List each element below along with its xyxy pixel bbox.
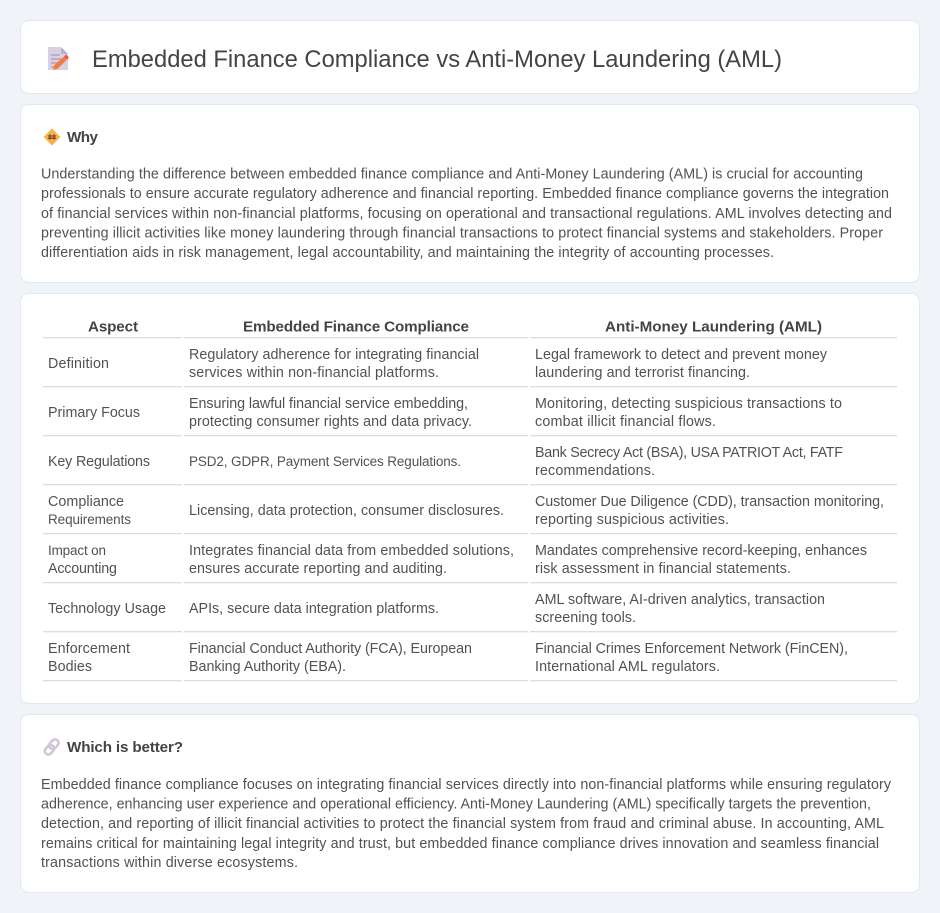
text block: why paragraph: professionals to ensure accurate regulatory adherence and financial reporting. Embedded finance compliance governs the integration	[41, 186, 889, 202]
row: key regulations: Bank Secrecy Act (BSA), USA PATRIOT Act, FATF	[535, 445, 843, 461]
row: enforcement bodies: Enforcement	[48, 641, 130, 657]
table header row: Aspect	[88, 318, 138, 336]
text block: why paragraph	[41, 166, 892, 261]
row: enforcement bodies: Financial Crimes Enforcement Network (FinCEN),	[535, 641, 848, 657]
row: definition	[48, 347, 828, 381]
row: key regulations: Key Regulations	[48, 454, 150, 470]
row: definition: services within non-financial platforms.	[189, 365, 439, 381]
row: enforcement bodies	[48, 641, 848, 675]
row: impact on accounting: risk assessment in financial statements.	[535, 561, 791, 577]
title: Embedded Finance Compliance vs Anti-Money Laundering (AML)	[92, 46, 782, 73]
text block: which is better paragraph: Embedded finance compliance focuses on integrating financial services directly into non-financial platforms while ensuring regulatory	[41, 777, 892, 793]
row: impact on accounting: Impact on	[48, 543, 106, 558]
icon: chain link	[43, 738, 60, 756]
row: definition: Legal framework to detect and prevent money	[535, 347, 828, 363]
panel: which is better	[20, 714, 920, 892]
row: impact on accounting	[48, 543, 867, 577]
row: technology usage: APIs, secure data integration platforms.	[189, 601, 439, 617]
row: impact on accounting: Integrates financial data from embedded solutions,	[189, 543, 514, 559]
row: definition: Regulatory adherence for integrating financial	[189, 347, 479, 363]
text block: why paragraph: differentiation aids in risk management, legal accountability, and maintaining the integrity of accounting processes.	[41, 245, 774, 261]
row: compliance requirements	[48, 494, 884, 528]
row: primary focus: combat illicit financial flows.	[535, 414, 716, 430]
row: enforcement bodies: Banking Authority (EBA).	[189, 659, 346, 675]
row: enforcement bodies: Bodies	[48, 659, 92, 675]
row: technology usage: screening tools.	[535, 610, 636, 626]
row: compliance requirements: Requirements	[48, 512, 131, 527]
text block: why paragraph: Understanding the difference between embedded finance compliance and Anti-Money Laundering (AML) is crucial for accounting	[41, 166, 863, 182]
panel: title header	[20, 20, 920, 94]
row: enforcement bodies: International AML regulators.	[535, 659, 720, 675]
row: primary focus: Ensuring lawful financial service embedding,	[189, 396, 468, 412]
row: primary focus	[48, 396, 842, 430]
table header row: Embedded Finance Compliance	[243, 318, 469, 336]
row: impact on accounting: ensures accurate reporting and auditing.	[189, 561, 447, 577]
row: primary focus: Monitoring, detecting suspicious transactions to	[535, 396, 842, 412]
row: compliance requirements: Licensing, data protection, consumer disclosures.	[189, 503, 504, 519]
row: primary focus: Primary Focus	[48, 405, 140, 421]
text block: which is better paragraph: remains critical for maintaining legal integrity and trust, but embedded finance compliance drives innovation and seamless financial	[41, 836, 879, 852]
row: impact on accounting: Accounting	[48, 561, 117, 577]
icon: orange diamond	[44, 128, 60, 146]
icon: document with pencil	[48, 47, 69, 70]
row: technology usage: Technology Usage	[48, 601, 166, 617]
text block: why paragraph: preventing illicit activities like money laundering through financial transactions to protect financial systems and stakeholders. Proper	[41, 226, 883, 242]
table header row	[88, 318, 822, 336]
text block: which is better paragraph: detection, and reporting of illicit financial activities to protect the financial system from fraud and criminal abuse. In accounting, AML	[41, 816, 884, 832]
row: compliance requirements: Customer Due Diligence (CDD), transaction monitoring,	[535, 494, 884, 510]
row: key regulations	[48, 445, 843, 479]
row: definition: Definition	[48, 356, 109, 372]
row: definition: laundering and terrorist financing.	[535, 365, 750, 381]
text block: which is better paragraph: adherence, enhancing user experience and operational efficiency. Anti-Money Laundering (AML) specifically targets the prevention,	[41, 796, 871, 812]
row: impact on accounting: Mandates comprehensive record-keeping, enhances	[535, 543, 867, 559]
row: key regulations: PSD2, GDPR, Payment Services Regulations.	[189, 454, 461, 469]
text block: which is better paragraph: transactions within diverse ecosystems.	[41, 855, 298, 871]
panel: why	[20, 104, 920, 282]
row: technology usage	[48, 592, 825, 626]
table header row: Anti-Money Laundering (AML)	[605, 318, 822, 336]
row: compliance requirements: reporting suspicious activities.	[535, 512, 729, 528]
row: technology usage: AML software, AI-driven analytics, transaction	[535, 592, 825, 608]
panel: comparison table	[20, 294, 920, 704]
row: primary focus: protecting consumer rights and data privacy.	[189, 414, 472, 430]
row: key regulations: recommendations.	[535, 463, 655, 479]
row: enforcement bodies: Financial Conduct Authority (FCA), European	[189, 641, 472, 657]
heading: why: Why	[67, 129, 99, 146]
row: compliance requirements: Compliance	[48, 494, 124, 510]
heading: which is better: Which is better?	[67, 739, 183, 756]
text block: which is better paragraph	[41, 777, 892, 871]
text block: why paragraph: of financial services within non-financial platforms, focusing on operational and transactional regulations. AML involves detecting and	[41, 206, 892, 222]
